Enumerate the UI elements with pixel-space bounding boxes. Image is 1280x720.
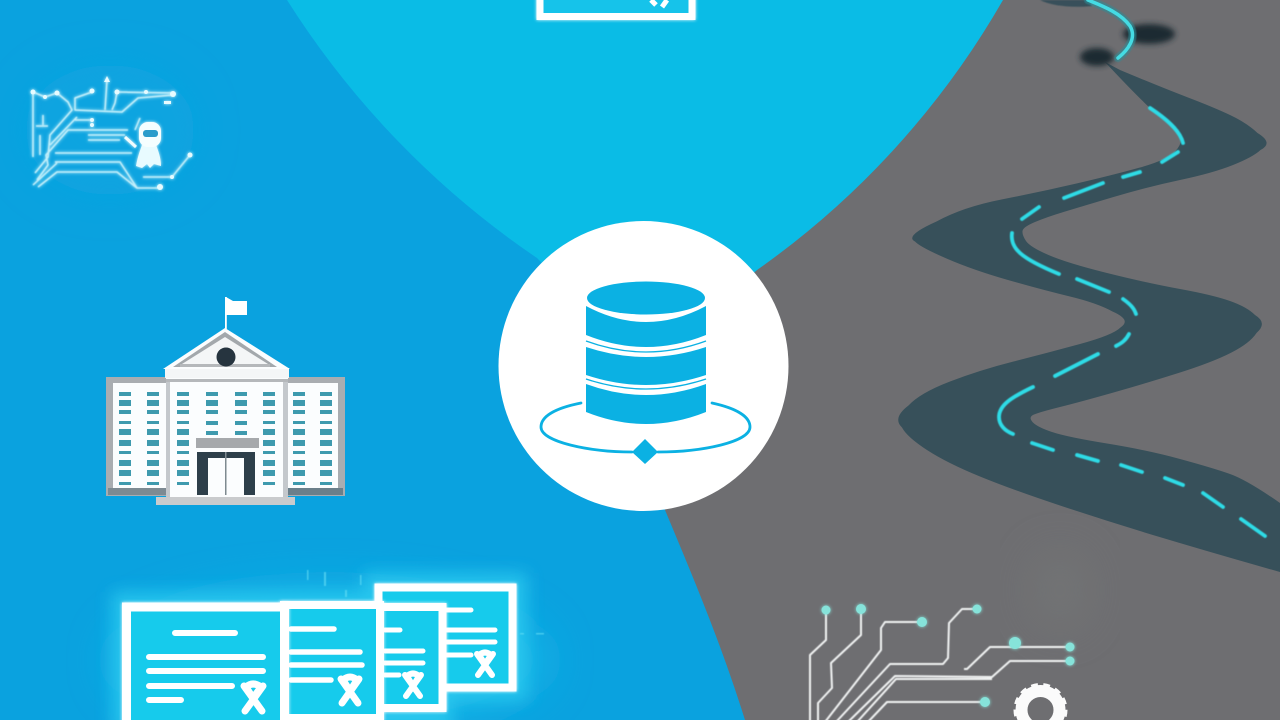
icon: school building	[106, 297, 345, 505]
central white circle with database icon	[498, 221, 788, 511]
winding road	[898, 0, 1280, 572]
road surface	[898, 62, 1280, 572]
nodes	[822, 604, 1074, 707]
road dashes	[999, 108, 1265, 536]
centre block	[165, 368, 289, 498]
windows	[119, 392, 332, 485]
circuit traces	[33, 80, 190, 188]
glow behind documents	[112, 573, 527, 720]
ring diamond node	[632, 439, 658, 464]
base step	[156, 497, 295, 505]
right wing	[286, 377, 345, 496]
circuit nodes	[30, 76, 192, 190]
pediment	[163, 328, 290, 369]
icon: certificate top fragment	[540, 0, 692, 16]
traces	[810, 609, 1070, 720]
certificate 1	[126, 607, 284, 720]
icon: stack of certificates	[112, 570, 544, 720]
certificate 2	[284, 605, 380, 718]
gear	[1016, 686, 1065, 720]
road dark shadow blobs	[1080, 24, 1175, 66]
robot	[125, 122, 161, 168]
flag	[225, 297, 247, 329]
road glowing top line	[1088, 0, 1132, 58]
panel: cyan top lens	[287, 0, 1003, 366]
certificate 4	[378, 588, 512, 688]
panel: gray right background	[643, 0, 1280, 720]
sparkles	[307, 570, 544, 634]
road top fragment	[1040, 0, 1092, 7]
certificate 3	[378, 607, 442, 708]
door	[196, 438, 259, 495]
icon: circuit with gear bottom right	[810, 604, 1074, 720]
icon: database cylinder	[586, 282, 706, 424]
ring around database	[541, 403, 750, 452]
icon: robot and circuit top left	[30, 76, 192, 190]
left wing	[106, 377, 168, 496]
